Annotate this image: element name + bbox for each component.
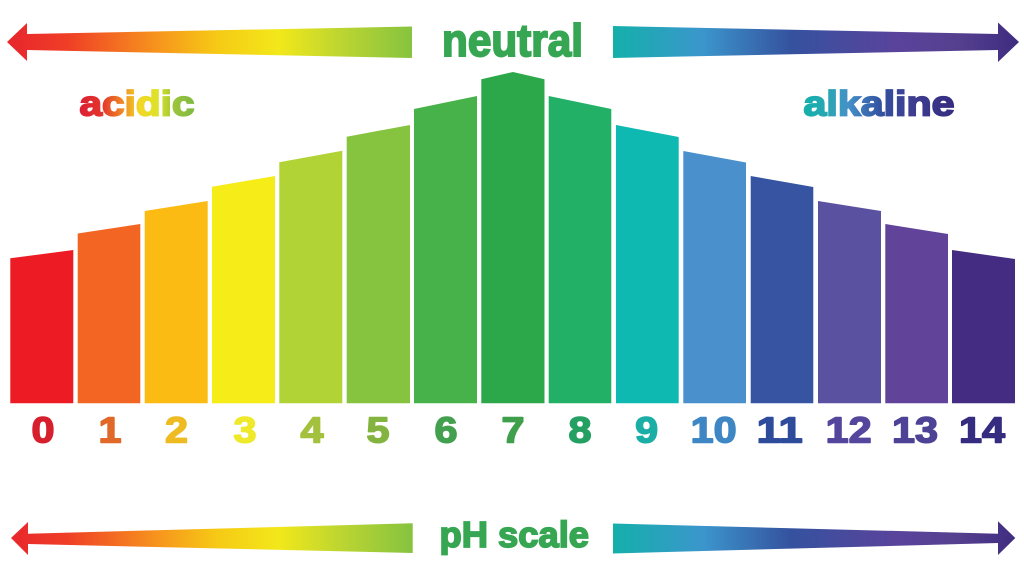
label: alkaline: alkaline xyxy=(804,84,954,124)
number 1: 1 xyxy=(98,410,122,450)
bar: pH 10 xyxy=(683,151,746,403)
number 8: 8 xyxy=(568,410,592,450)
heading: pH scale: pH scale xyxy=(440,514,589,555)
bar: pH 12 xyxy=(818,201,881,403)
bar: pH 7 xyxy=(481,72,544,403)
label: acidic: acidic xyxy=(80,84,194,124)
bar: pH 4 xyxy=(279,151,342,403)
bar: pH 5 xyxy=(347,125,410,403)
bar: pH 2 xyxy=(145,201,208,403)
number 14: 14 xyxy=(959,410,1005,450)
bar: pH 0 xyxy=(10,250,73,403)
arrow: top left acidic xyxy=(7,23,412,61)
bar: pH 3 xyxy=(212,176,275,403)
number 11: 11 xyxy=(757,410,803,450)
bar: pH 9 xyxy=(616,125,679,403)
number 3: 3 xyxy=(234,410,256,450)
bar: pH 6 xyxy=(414,96,477,403)
arrow: bottom left acidic xyxy=(11,522,413,555)
heading: neutral: neutral xyxy=(442,15,583,66)
bar: pH 8 xyxy=(549,96,611,403)
bar chart: pH columns xyxy=(10,72,1015,403)
bar: pH 14 xyxy=(952,250,1015,403)
number 10: 10 xyxy=(691,410,737,450)
number 6: 6 xyxy=(434,410,458,450)
number 9: 9 xyxy=(635,410,658,450)
number 13: 13 xyxy=(892,410,938,450)
number 7: 7 xyxy=(502,410,524,450)
number 2: 2 xyxy=(165,410,188,450)
number 4: 4 xyxy=(300,410,324,450)
arrow: top right alkaline xyxy=(613,22,1019,62)
number 0: 0 xyxy=(32,410,54,450)
bar: pH 11 xyxy=(751,176,813,403)
arrow: bottom right alkaline xyxy=(613,521,1015,555)
number 12: 12 xyxy=(826,410,872,450)
bar: pH 1 xyxy=(78,224,140,403)
number 5: 5 xyxy=(366,410,390,450)
axis numbers 0 to 14 xyxy=(32,410,1005,450)
bar: pH 13 xyxy=(885,224,948,403)
